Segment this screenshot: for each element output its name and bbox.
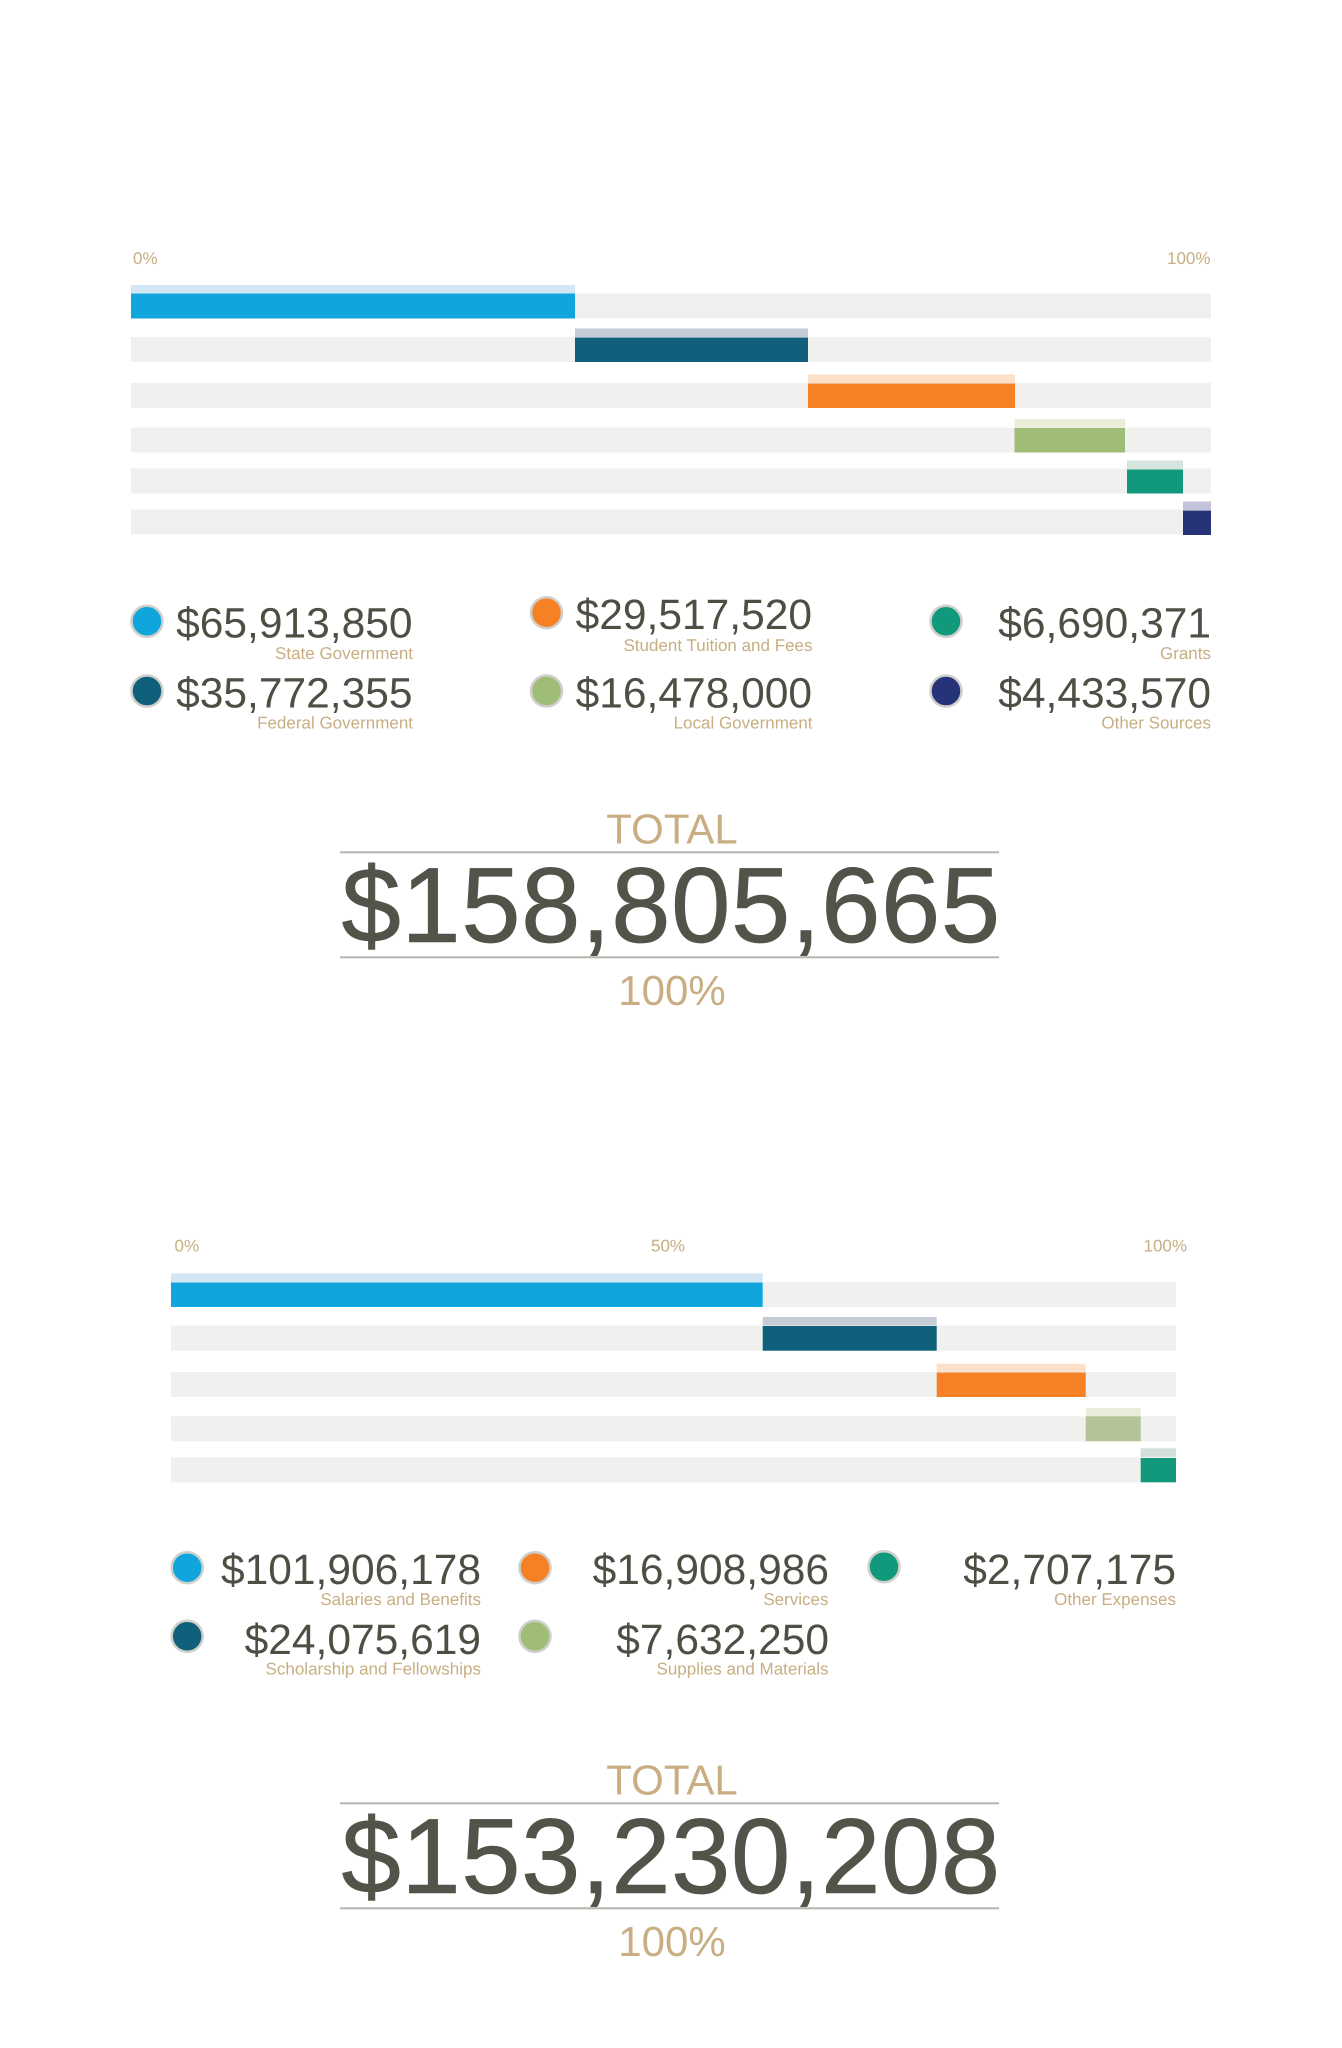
legend item: local government: [531, 671, 813, 733]
legend item: local government: $16,478,000: [576, 671, 812, 718]
legend item: grants: Grants: [1160, 644, 1211, 663]
legend item: supplies and materials: [520, 1617, 829, 1679]
legend item: state government: State Government: [275, 644, 413, 663]
legend item: services: $16,908,986: [593, 1547, 829, 1594]
legend item: salaries and benefits: Salaries and Benefits: [320, 1590, 481, 1609]
panel: expenses chart: [171, 1237, 1187, 1482]
legend item: student tuition and fees: Student Tuition and Fees: [623, 636, 812, 655]
total amount: $153,230,208: [341, 1796, 1001, 1916]
legend item: services: [520, 1547, 829, 1609]
bar: scholarship and fellowships: [171, 1317, 1176, 1351]
legend item: other expenses: [868, 1547, 1176, 1609]
panel: expenses legend: [172, 1547, 1176, 1679]
panel: revenue chart: [131, 249, 1211, 535]
legend item: grants: [930, 600, 1211, 663]
bar: grants: [131, 460, 1211, 494]
axis label: 0%: 0%: [133, 249, 158, 268]
legend item: scholarship and fellowships: $24,075,619: [245, 1617, 481, 1664]
legend item: supplies and materials: $7,632,250: [616, 1617, 829, 1664]
legend item: federal government: Federal Government: [257, 714, 413, 733]
bar: salaries and benefits: [171, 1273, 1176, 1307]
heading: total: TOTAL: [606, 806, 738, 853]
legend item: scholarship and fellowships: [172, 1617, 481, 1679]
legend item: other expenses: Other Expenses: [1054, 1590, 1176, 1609]
axis label: 100%: 100%: [1144, 1237, 1187, 1256]
legend item: other sources: Other Sources: [1101, 714, 1211, 733]
legend item: grants: $6,690,371: [998, 600, 1211, 648]
legend item: salaries and benefits: $101,906,178: [221, 1547, 481, 1594]
heading: total: TOTAL: [606, 1757, 738, 1804]
legend item: other sources: $4,433,570: [998, 671, 1211, 718]
bar: supplies and materials: [171, 1408, 1176, 1441]
panel: revenue legend: [132, 592, 1211, 733]
legend item: state government: $65,913,850: [176, 600, 412, 648]
axis label: 100%: 100%: [1167, 249, 1210, 268]
bar: federal government: [131, 328, 1211, 362]
legend item: supplies and materials: Supplies and Materials: [657, 1660, 828, 1679]
legend item: federal government: [132, 671, 413, 733]
axis label: 50%: 50%: [651, 1237, 685, 1256]
bar: other sources: [131, 502, 1211, 535]
bar: local government: [131, 419, 1211, 452]
panel: expenses total: [340, 1757, 1001, 1965]
legend item: state government: [132, 600, 413, 663]
legend item: student tuition and fees: [531, 592, 812, 655]
legend item: scholarship and fellowships: Scholarship and Fellowships: [266, 1660, 481, 1679]
legend item: student tuition and fees: $29,517,520: [576, 592, 812, 639]
total percent: 100%: [618, 1918, 726, 1965]
legend item: local government: Local Government: [674, 714, 813, 733]
legend item: other sources: [930, 671, 1211, 733]
bar: services: [171, 1364, 1176, 1397]
legend item: federal government: $35,772,355: [176, 671, 412, 718]
total percent: 100%: [618, 967, 726, 1014]
bar: other expenses: [171, 1448, 1176, 1482]
bar: state government: [131, 285, 1211, 318]
legend item: salaries and benefits: [172, 1547, 481, 1609]
bar: student tuition and fees: [131, 374, 1211, 408]
axis label: 0%: 0%: [174, 1237, 199, 1256]
panel: revenue total: [340, 806, 1001, 1014]
legend item: other expenses: $2,707,175: [963, 1547, 1176, 1594]
total amount: $158,805,665: [341, 845, 1001, 965]
legend item: services: Services: [763, 1590, 828, 1609]
